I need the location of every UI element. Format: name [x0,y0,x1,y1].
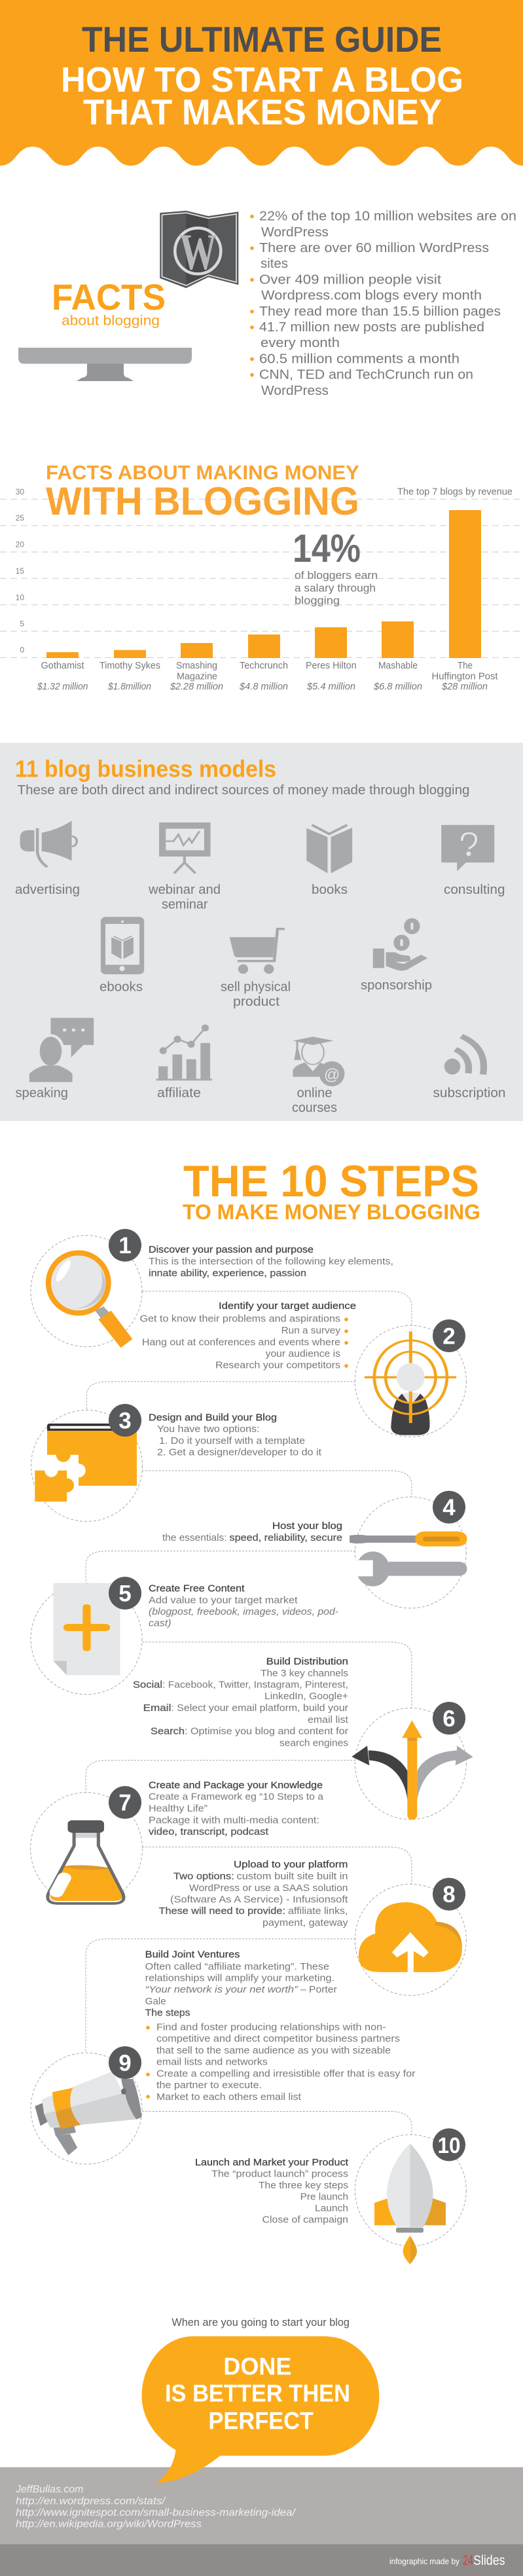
bar chart: top 7 blogs by revenue: $1.8million [107,682,151,692]
text: step 9: Create a compelling and irresistible offer that is easy for [156,2068,416,2079]
text: step 9: the partner to execute. [156,2080,262,2091]
text: step 4: the essentials: [162,1532,226,1543]
text: step 9: Gale [145,1996,166,2007]
bar chart: top 7 blogs by revenue: Gothamist [41,661,84,671]
icon: flask [48,1820,124,1904]
label: webinar and seminar [148,883,221,912]
text: step 1: This is the intersection of the following key elements, [149,1256,393,1267]
bar chart: top 7 blogs by revenue: 30 [16,487,24,496]
step number 4 [433,1491,465,1524]
label: subscription: subscription [433,1086,505,1100]
step number 10 [433,2128,465,2161]
text: step 9: The steps [145,2008,190,2019]
step number 8: 8 [442,1882,456,1907]
text: step 6: email list [308,1714,349,1725]
bar chart: top 7 blogs by revenue: Mashable [378,661,418,671]
panel: step 9 [31,1949,416,2164]
text block: wordpress facts list: 60.5 million comments a month [259,352,460,366]
text: step 6: search engines [280,1737,348,1748]
bar chart: top 7 blogs by revenue: 20 [16,540,24,549]
bar chart: top 7 blogs by revenue: Magazine [177,671,217,682]
icon: document with plus [54,1583,120,1675]
icon: online courses graduate [293,1037,344,1086]
heading: facts about making money: FACTS ABOUT MAKING MONEY [46,461,359,484]
step number 3 [109,1404,141,1437]
text: step 6: LinkedIn, Google+ [264,1691,348,1702]
label: consulting: consulting [444,883,505,897]
text block: wordpress facts list: CNN, TED and TechCrunch run on [259,368,473,382]
text: step 10: The three key steps [259,2180,348,2191]
text: step 2 [140,1300,356,1371]
text: step 6: The 3 key channels [261,1668,348,1679]
icon: consulting bubble [441,825,494,872]
bar chart: top 7 blogs by revenue: $6.8 million [373,682,422,692]
step number 1 [109,1229,141,1262]
panel: step 2 [140,1300,466,1437]
step number 6 [433,1702,465,1735]
step number 5: 5 [118,1581,132,1607]
panel: 11 blog business models [0,743,523,1121]
label: webinar and seminar: seminar [162,898,208,912]
text: step 10: The “product launch” process [211,2169,348,2179]
text: step 9: “Your network is your net worth” [145,1984,298,1995]
label: speaking: speaking [16,1086,68,1100]
text: step 10: Pre launch [300,2191,348,2202]
step number 6: 6 [442,1706,456,1731]
callout: done is better then perfect [142,2336,379,2483]
step number 4: 4 [442,1495,456,1520]
text: step 9: Build Joint Ventures [145,1949,240,1960]
step number 9: 9 [118,2051,132,2076]
text: step 7: video, transcript, podcast [149,1826,269,1837]
icon: online courses graduate: @ [324,1066,340,1084]
label: online courses: online [297,1086,333,1100]
text: step 2: your audience is [266,1348,340,1359]
text: step 7: Create a Framework eg “10 Steps to a [149,1791,324,1802]
text: step 8: These will need to provide: [159,1905,285,1917]
label: online courses [292,1086,337,1115]
header banner [0,0,523,166]
icon: sponsorship hand and coins [373,918,427,970]
callout: 14 percent of bloggers: blogging [295,595,340,607]
bar chart: top 7 blogs by revenue: Techcrunch [240,661,288,671]
bar chart: top 7 blogs by revenue: 0 [20,646,24,655]
callout: 14 percent of bloggers: of bloggers earn [295,569,378,581]
panel: step 3 [31,1404,322,1522]
callout: done is better then perfect: PERFECT [208,2408,314,2435]
text: step 9: relationships will amplify your marketing. [145,1972,334,1984]
panel: step 7 [30,1780,324,1904]
text: step 10 [195,2157,349,2226]
heading: facts about blogging: about blogging [62,314,160,329]
label: sell physical product [221,980,291,1009]
step number 2: 2 [442,1324,456,1349]
bar chart: top 7 blogs by revenue: $4.8 million [239,682,288,692]
label: ebooks: ebooks [99,980,143,995]
text: step 3 [149,1412,322,1458]
text: step 8: (Software As A Service) - Infusionsoft [170,1894,348,1905]
text: step 8: custom built site built in [237,1871,348,1882]
icon: subscription rss [444,1036,484,1075]
callout: done is better then perfect: IS BETTER THEN [165,2380,350,2407]
footer: credit bar: 24 [463,2553,473,2568]
label: sell physical product: sell physical [221,980,291,995]
text: step 6: : Select your email platform, build your [171,1702,348,1714]
icon: monitor [18,242,192,381]
icon: speaker [29,1018,94,1082]
text block: wordpress facts list: WordPress [261,384,329,398]
text: step 3: 1. Do it yourself with a template [159,1435,305,1446]
icon: wordpress map [160,211,238,288]
bar chart: top 7 blogs by revenue: The [458,661,473,671]
text: step 6: : Optimise you blog and content for [185,1726,348,1737]
text: step 9: Market to each others email list [156,2091,302,2103]
bar chart: top 7 blogs by revenue: $2.28 million [170,682,223,692]
text: step 2: Run a survey [281,1325,341,1336]
text block: wordpress facts list: Over 409 million people visit [259,272,441,287]
header banner: THE ULTIMATE GUIDE [82,19,442,60]
panel: step 1 [31,1229,393,1348]
text: step 7 [149,1780,324,1837]
footer: credit bar: infographic made by [389,2556,460,2566]
label: books: books [312,883,348,897]
icon: book [306,825,352,874]
text block: wordpress facts list: WordPress [261,225,329,240]
icon: cloud upload [359,1902,462,1972]
footer: credit bar [0,2545,523,2576]
panel: step 10 [195,2128,466,2264]
text: step 7: Create and Package your Knowledge [149,1780,323,1791]
text: step 5 [149,1583,338,1629]
text: sources: http://en.wikipedia.org/wiki/WordPress [16,2518,202,2530]
bar chart: top 7 blogs by revenue: Peres Hilton [306,661,356,671]
text: step 3: 2. Get a designer/developer to do it [157,1447,322,1458]
heading: 11 blog business models: 11 blog business models [15,755,276,782]
header banner: HOW TO START A BLOG [61,60,463,100]
subheading: These are both direct and indirect sources of money made through blogging [17,783,470,798]
text: step 9: competitive and direct competitor business partners [156,2033,400,2044]
bar chart: top 7 blogs by revenue: $28 million [441,682,488,692]
text block: wordpress facts list: every month [261,336,340,350]
text block: wordpress facts list: They read more than 15.5 billion pages [259,304,501,319]
text: step 9: email lists and networks [156,2057,268,2068]
text block: wordpress facts list [250,210,516,398]
text: step 6: Social [133,1680,162,1691]
text: step 6 [133,1656,349,1748]
text: step 2: Hang out at conferences and events where [142,1336,340,1348]
label: webinar and seminar: webinar and [148,883,221,897]
text: step 5: (blogpost, freebook, images, videos, pod- [149,1606,338,1617]
text: step 8: Two options: [173,1871,234,1882]
step number 1: 1 [118,1233,132,1259]
icon: webinar board [159,822,211,874]
icon: shopping cart [230,929,285,974]
step number 2 [433,1319,465,1352]
text: step 5: cast) [149,1618,171,1629]
step number 5 [109,1577,141,1610]
step number 10: 10 [437,2133,461,2158]
text: step 4: Host your blog [272,1520,342,1532]
label: advertising: advertising [15,883,80,897]
icon: ebook tablet [101,917,144,974]
footer: sources panel [0,2467,523,2545]
text: step 7: Healthy Life” [149,1803,207,1814]
text: sources: http://www.ignitespot.com/small-business-marketing-idea/ [16,2507,297,2518]
text: step 3: You have two options: [157,1424,259,1435]
text: step 9 [145,1949,416,2103]
heading: the 10 steps: TO MAKE MONEY BLOGGING [183,1200,480,1224]
callout: 14 percent of bloggers [293,526,378,607]
panel: step 5 [31,1577,338,1695]
text: step 8 [159,1859,348,1928]
bar chart: top 7 blogs by revenue [0,487,523,692]
text block: wordpress facts list: There are over 60 million WordPress [259,241,489,255]
icon: wordpress map: W [179,223,217,280]
heading: facts about blogging: FACTS [52,276,166,318]
icon: three way arrows [352,1720,473,1820]
text: step 1: Discover your passion and purpose [149,1244,314,1255]
text: step 8: affiliate links, [288,1905,348,1917]
bar chart: top 7 blogs by revenue: Huffington Post [432,671,497,682]
step number 9 [109,2046,141,2079]
bar chart: top 7 blogs by revenue: The top 7 blogs by revenue [397,487,513,498]
step number 7: 7 [118,1790,132,1816]
icon: megaphone [35,2071,142,2156]
text: step 5: Create Free Content [149,1583,245,1594]
text: step 9: Often called “affiliate marketing”. These [145,1961,329,1972]
icon: screwdriver and wrench [350,1532,467,1587]
text: call to action question: When are you going to start your blog [171,2316,350,2328]
callout: 14 percent of bloggers: a salary through [295,581,376,594]
text: step 5: Add value to your target market [149,1594,298,1606]
bar chart: top 7 blogs by revenue: 5 [20,619,24,629]
text: step 9: Find and foster producing relationships with non- [156,2022,386,2033]
text block: wordpress facts list: 41.7 million new posts are published [259,320,484,335]
bar chart: top 7 blogs by revenue: 15 [16,566,24,576]
text: step 6: : Facebook, Twitter, Instagram, Pinterest, [162,1680,348,1691]
dashed connector path [86,1291,412,2135]
text block: wordpress facts list: sites [261,257,288,271]
step number 8 [433,1878,465,1911]
text block: wordpress facts list: 22% of the top 10 million websites are on [259,210,516,224]
text: sources: JeffBullas.com [15,2484,83,2495]
text: step 6: Search [151,1726,185,1737]
callout: 14 percent of bloggers: 14% [293,526,361,570]
icon: puzzle [35,1424,137,1501]
text: step 6: Email [143,1702,171,1714]
text: step 10: Launch [315,2203,348,2214]
text: step 4: speed, reliability, secure [229,1532,342,1543]
bar chart: top 7 blogs by revenue: $5.4 million [306,682,355,692]
label: online courses: courses [292,1101,337,1115]
callout: done is better then perfect: DONE [223,2353,291,2380]
panel: step 8 [159,1859,466,1995]
text: step 7: Package it with multi-media content: [149,1814,319,1826]
text: step 2: Get to know their problems and aspirations [140,1314,340,1325]
panel: step 6 [133,1656,473,1820]
text: step 1: innate ability, experience, passion [149,1268,306,1279]
step number 7 [109,1786,141,1819]
icon: affiliate chart [156,1024,212,1080]
text: step 8: WordPress or use a SAAS solution [189,1883,348,1894]
text: step 2: Identify your target audience [219,1300,356,1312]
text: step 3: Design and Build your Blog [149,1412,277,1423]
text: step 6: Build Distribution [266,1656,348,1667]
label: sell physical product: product [233,995,280,1009]
text: step 8: payment, gateway [262,1917,348,1928]
text: step 9: that sell to the same audience as you with sizeable [156,2045,391,2056]
text: step 2: Research your competitors [215,1360,340,1371]
icon: target on person [365,1331,456,1435]
footer: credit bar: Slides [473,2553,505,2568]
bar chart: top 7 blogs by revenue: $1.32 million [37,682,88,692]
label: affiliate: affiliate [157,1086,201,1100]
label: sponsorship: sponsorship [361,978,432,993]
text: step 9: – Porter [300,1984,337,1995]
text: sources [15,2484,297,2530]
bar chart: top 7 blogs by revenue: Timothy Sykes [99,661,160,671]
heading: the 10 steps: THE 10 STEPS [183,1156,479,1206]
text: step 10: Close of campaign [262,2215,348,2226]
text: step 10: Launch and Market your Product [195,2157,349,2168]
bar chart: top 7 blogs by revenue: 10 [16,593,24,602]
bar chart: top 7 blogs by revenue: Smashing [176,661,217,671]
panel: step 4 [162,1491,467,1608]
bar chart: top 7 blogs by revenue: 25 [16,513,24,523]
header banner: THAT MAKES MONEY [83,92,442,132]
text block: wordpress facts list: Wordpress.com blogs every month [261,289,482,303]
text: sources: http://en.wordpress.com/stats/ [16,2495,166,2507]
icon: magnifying glass [46,1250,132,1348]
text: step 4 [162,1520,342,1543]
text: step 1 [149,1244,393,1279]
step number 3: 3 [118,1408,132,1434]
heading: facts about making money: WITH BLOGGING [46,479,359,523]
text: step 8: Upload to your platform [234,1859,348,1870]
icon: rocket [374,2144,446,2264]
icon: advertising megaphone [20,820,77,867]
heading: facts about making money [46,461,359,523]
